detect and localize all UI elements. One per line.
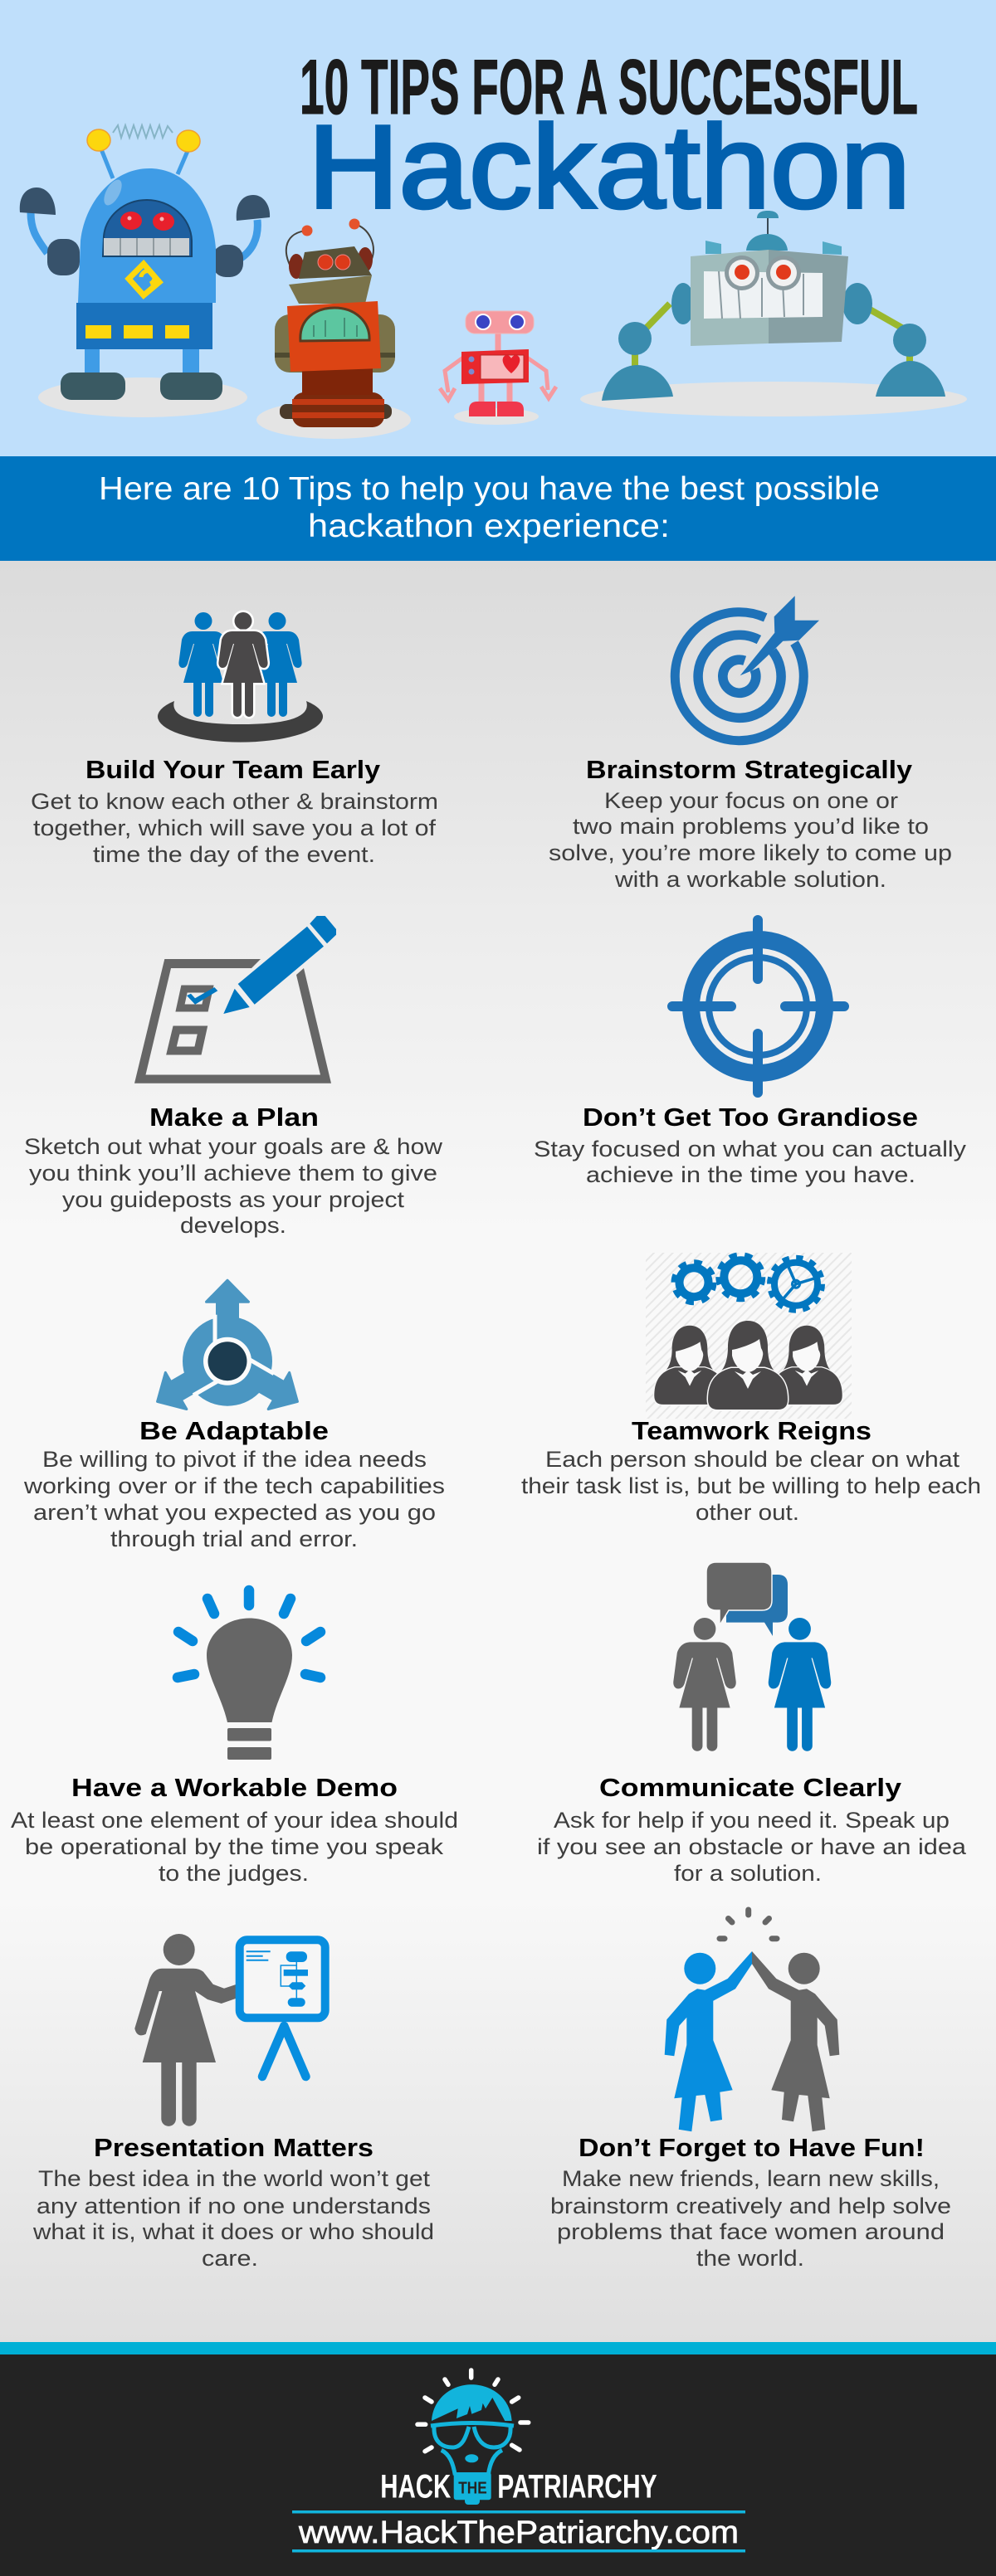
panel: brainstorm strategically — [549, 596, 952, 892]
body text: Be willing to pivot if the idea needs — [42, 1447, 427, 1472]
body text: you guideposts as your project — [62, 1187, 405, 1212]
icon: checklist and pencil — [134, 916, 336, 1083]
body text: the world. — [696, 2246, 804, 2271]
body text: with a workable solution. — [614, 867, 886, 892]
panel: be adaptable — [23, 1280, 445, 1551]
body text: Make new friends, learn new skills, — [562, 2166, 940, 2191]
body text: you think you’ll achieve them to give — [29, 1161, 437, 1186]
intro banner — [0, 456, 996, 561]
body text: other out. — [696, 1500, 799, 1525]
logo word: PATRIARCHY: PATRIARCHY — [497, 2469, 657, 2505]
banner line 2: hackathon experience: — [308, 509, 670, 544]
banner line 1: Here are 10 Tips to help you have the best possible — [99, 471, 880, 507]
body text — [11, 1808, 458, 1886]
heading: Communicate Clearly — [599, 1773, 902, 1802]
body text: Stay focused on what you can actually — [534, 1137, 967, 1161]
heading: Be Adaptable — [139, 1416, 329, 1445]
panel: teamwork reigns — [521, 1253, 981, 1525]
body text: problems that face women around — [557, 2219, 945, 2244]
robot: orange — [256, 219, 411, 439]
body text: working over or if the tech capabilities — [23, 1473, 445, 1498]
logo word: HACK: HACK — [380, 2469, 451, 2505]
heading: Brainstorm Strategically — [586, 755, 913, 784]
body text: together, which will save you a lot of — [33, 816, 437, 840]
body text: solve, you’re more likely to come up — [549, 840, 952, 865]
heading: Don’t Get Too Grandiose — [583, 1103, 918, 1132]
heading: Presentation Matters — [94, 2133, 374, 2162]
body text: their task list is, but be willing to help each — [521, 1473, 981, 1498]
body text: achieve in the time you have. — [586, 1162, 915, 1187]
panel: don't get too grandiose — [534, 920, 967, 1187]
robot: grey — [580, 211, 967, 416]
body text: develops. — [180, 1213, 286, 1238]
body text: if you see an obstacle or have an idea — [537, 1834, 967, 1859]
panel: make a plan — [24, 916, 443, 1238]
icon: three arrows — [147, 1280, 308, 1420]
body text: Sketch out what your goals are & how — [24, 1134, 443, 1159]
footer — [0, 2354, 996, 2576]
body text: The best idea in the world won’t get — [38, 2166, 431, 2191]
icon: team on platform — [158, 612, 323, 743]
panel: have a workable demo — [11, 1590, 458, 1886]
icon: crosshair — [672, 920, 844, 1093]
panel: build your team early — [31, 612, 438, 867]
body text — [23, 1447, 445, 1551]
body text: Keep your focus on one or — [604, 788, 898, 813]
body text: care. — [202, 2246, 258, 2271]
body text: two main problems you’d like to — [573, 814, 929, 839]
icon: light bulb — [178, 1590, 320, 1760]
body text: Ask for help if you need it. Speak up — [554, 1808, 950, 1833]
heading: Build Your Team Early — [85, 755, 381, 784]
heading: Have a Workable Demo — [71, 1773, 398, 1802]
icon: gears and team — [646, 1253, 852, 1419]
body text: brainstorm creatively and help solve — [550, 2194, 951, 2218]
body text — [32, 2166, 434, 2271]
robot: blue — [20, 125, 270, 417]
body text: Get to know each other & brainstorm — [31, 789, 438, 814]
logo: bulb with face — [417, 2370, 529, 2505]
body text: to the judges. — [159, 1861, 309, 1886]
robot: pink — [440, 311, 556, 425]
body text — [549, 788, 952, 892]
logo word: THE: THE — [458, 2480, 487, 2498]
heading: Don’t Forget to Have Fun! — [579, 2133, 925, 2162]
body text — [24, 1134, 443, 1238]
body text: for a solution. — [674, 1861, 822, 1886]
website url: www.HackThePatriarchy.com — [298, 2515, 739, 2550]
body text — [537, 1808, 967, 1886]
icon: two women high five — [665, 1910, 839, 2131]
body text — [550, 2166, 951, 2271]
body text: aren’t what you expected as you go — [33, 1500, 436, 1525]
body text: time the day of the event. — [93, 842, 375, 867]
body text: At least one element of your idea should — [11, 1808, 458, 1833]
body text: through trial and error. — [110, 1527, 358, 1551]
panel: communicate clearly — [537, 1562, 967, 1886]
body text: what it is, what it does or who should — [32, 2219, 434, 2244]
panel: don't forget to have fun — [550, 1910, 951, 2271]
icon: two women talking — [673, 1562, 831, 1751]
title — [300, 43, 918, 233]
body text: any attention if no one understands — [37, 2194, 431, 2218]
body text: be operational by the time you speak — [25, 1834, 444, 1859]
title line 2: Hackathon — [308, 101, 911, 233]
body text — [521, 1447, 981, 1525]
panel: presentation matters — [32, 1934, 434, 2271]
footer accent bar — [0, 2342, 996, 2354]
hero background — [0, 0, 996, 456]
body text — [534, 1137, 967, 1187]
heading: Make a Plan — [149, 1103, 319, 1132]
website rule bottom — [292, 2549, 745, 2552]
content background — [0, 561, 996, 2342]
website rule top — [292, 2510, 745, 2514]
body text — [31, 789, 438, 867]
heading: Teamwork Reigns — [632, 1416, 872, 1445]
icon: woman presenting at board — [134, 1934, 325, 2126]
icon: target with dart — [675, 596, 819, 741]
body text: Each person should be clear on what — [545, 1447, 960, 1472]
